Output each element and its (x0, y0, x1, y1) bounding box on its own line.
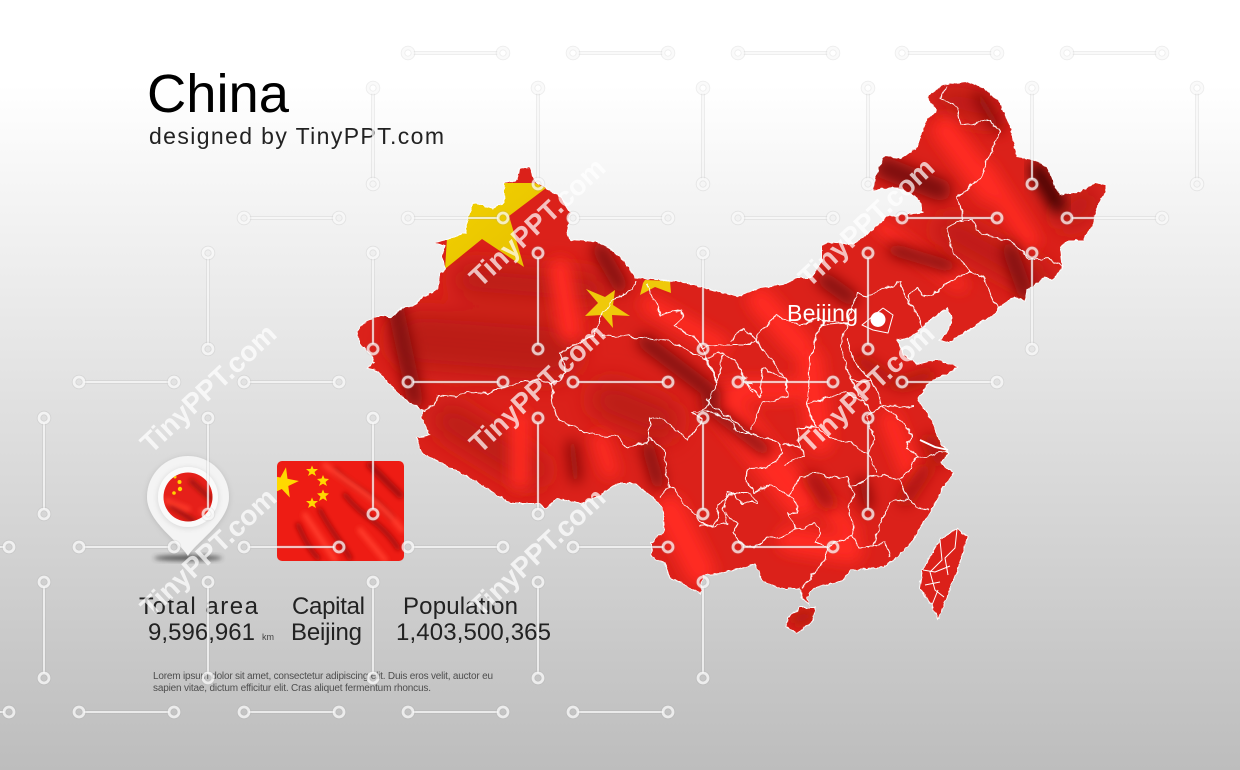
subtitle: designed by TinyPPT.com (149, 123, 444, 149)
total area value: 9,596,961 (148, 619, 255, 646)
description text: Lorem ipsum dolor sit amet, consectetur adipiscing elit. Duis eros velit, auctor eu (153, 671, 493, 682)
population label: Population (403, 593, 518, 620)
population value: 1,403,500,365 (396, 619, 551, 646)
description text: sapien vitae, dictum efficitur elit. Cras aliquet fermentum rhoncus. (153, 683, 431, 694)
watermarks: TinyPPT.com (792, 318, 940, 459)
thin provincial details (862, 308, 957, 605)
title: China (147, 64, 290, 124)
total area label: Total area (139, 593, 259, 620)
flag stars (277, 466, 329, 508)
flag star: large yellow star (445, 183, 546, 269)
description text (153, 671, 493, 694)
capital value: Beijing (291, 619, 362, 646)
watermarks (134, 152, 940, 623)
province borders (423, 87, 1062, 588)
capital marker (870, 312, 886, 327)
watermarks: TinyPPT.com (134, 318, 282, 459)
map outline (358, 82, 1105, 632)
flag star: small yellow star (585, 289, 630, 328)
map fill and flag fold shading (357, 82, 1106, 633)
stat: total area (139, 593, 274, 646)
flag star: partial yellow star (640, 280, 671, 295)
capital label (787, 300, 886, 327)
watermarks: TinyPPT.com (463, 152, 611, 293)
watermarks: TinyPPT.com (463, 482, 611, 623)
icon: location pin with flag (147, 456, 229, 561)
pin body (147, 456, 229, 556)
map of China (356, 82, 1106, 634)
stat: population (396, 593, 551, 646)
stat: capital (291, 593, 365, 646)
flag fabric folds (298, 465, 402, 560)
watermarks: TinyPPT.com (134, 482, 282, 623)
capital label: Capital (292, 593, 365, 620)
watermarks: TinyPPT.com (792, 152, 940, 293)
pin inner ring (158, 467, 218, 527)
watermarks: TinyPPT.com (463, 318, 611, 459)
capital name: Beijing (787, 300, 858, 326)
icon: China flag (269, 461, 404, 561)
pin shadow (154, 555, 222, 561)
flag field (277, 461, 404, 561)
total area unit: km (262, 632, 274, 642)
pin flag disc (164, 472, 212, 522)
